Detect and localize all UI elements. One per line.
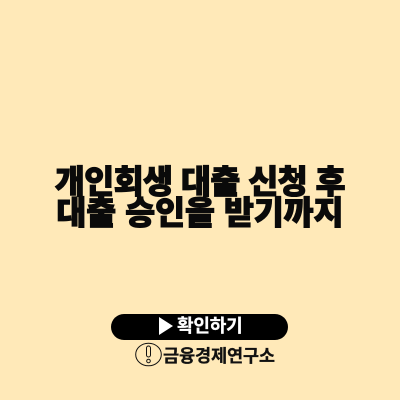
button: confirm: [111, 314, 288, 340]
button label: 확인하기: [177, 316, 242, 336]
title: [54, 164, 345, 231]
brand name: 금융경제연구소: [163, 346, 275, 366]
icon: exclamation circle: [135, 342, 162, 366]
brand logo: [135, 342, 275, 366]
title: 개인회생 대출 신청 후: [55, 164, 345, 200]
icon: play triangle: [159, 317, 173, 335]
title: 대출 승인을 받기까지: [56, 195, 344, 231]
